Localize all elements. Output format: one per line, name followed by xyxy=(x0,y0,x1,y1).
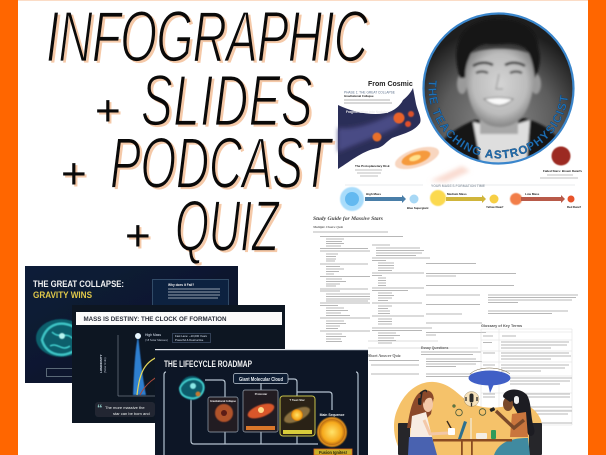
timeline: high mass xyxy=(340,187,429,211)
right chair xyxy=(529,423,542,455)
short answer key text xyxy=(369,360,419,374)
long answer questions heading: Essay Questions xyxy=(421,346,448,350)
quote: “ xyxy=(97,403,102,415)
timeline: low mass: Red Dwarf xyxy=(567,205,581,209)
infographic heading: From Cosmic xyxy=(368,81,413,88)
molecular cloud illustration xyxy=(180,376,204,400)
main sequence star: Main Sequence xyxy=(320,413,344,417)
table with tablet, cups and bowl xyxy=(433,418,512,455)
luminosity chart: (>8 Solar Masses) xyxy=(145,338,168,342)
panel: study guide document xyxy=(312,216,578,425)
luminosity chart: LUMINOSITY xyxy=(99,354,103,373)
glossary table xyxy=(481,324,572,425)
title line: + PODCAST: + xyxy=(63,152,89,200)
slide: the great collapse xyxy=(25,266,238,383)
title line: + QUIZ: QUIZ xyxy=(178,188,283,269)
fusion ignition label xyxy=(314,449,352,455)
title line: + PODCAST: PODCAST xyxy=(110,122,334,203)
left chair xyxy=(398,423,410,455)
infographic phase text xyxy=(342,88,395,114)
title line: + SLIDES: + xyxy=(97,88,123,138)
quote: The more massive the xyxy=(105,405,145,410)
fusion ignition label: Fusion Ignites! xyxy=(319,450,347,455)
title line: + SLIDES: + xyxy=(95,86,121,136)
slide heading: MASS IS DESTINY: THE CLOCK OF FORMATION xyxy=(84,317,226,323)
failed stars: brown dwarfs xyxy=(540,146,582,178)
card: gravitational collapse: Gravitational Collapse xyxy=(210,399,237,403)
timeline: high mass: Blue Supergiant xyxy=(407,206,429,210)
title line: INFOGRAPHIC: INFOGRAPHIC xyxy=(48,0,371,79)
roadmap connector lines xyxy=(164,372,358,455)
slide heading: THE GREAT COLLAPSE: xyxy=(33,279,124,289)
portrait ring xyxy=(424,14,574,164)
protoplanetary disk xyxy=(392,142,470,182)
woman with dark hair, right xyxy=(489,389,534,455)
giant molecular cloud label: Giant Molecular Cloud xyxy=(239,377,283,383)
quiz column 2 xyxy=(372,245,432,343)
title line: + SLIDES: SLIDES xyxy=(141,61,313,141)
card: t tauri star: T Tauri Star xyxy=(289,398,306,402)
section rule xyxy=(368,341,478,348)
circular caption: THE TEACHING ASTROPHYSICIST xyxy=(428,80,568,159)
timeline: medium mass: Medium Mass xyxy=(447,192,467,196)
quiz column 1 xyxy=(313,232,403,342)
slide heading: THE LIFECYCLE ROADMAP xyxy=(164,359,252,369)
infographic phase text: PHASE 1: THE GREAT COLLAPSE xyxy=(344,90,395,94)
panel: infographic preview xyxy=(338,81,582,211)
card: protostar xyxy=(243,390,278,432)
luminosity chart: High Mass xyxy=(145,333,161,337)
card: gravitational collapse xyxy=(208,397,238,432)
quote xyxy=(95,402,155,417)
callout box xyxy=(152,280,228,310)
timeline heading: YOUR MASS'S FORMATION TIME xyxy=(431,184,486,188)
teal nebula xyxy=(36,319,86,357)
speech bubble xyxy=(468,368,510,393)
card: t tauri star xyxy=(280,396,315,436)
study guide title: Study Guide for Massive Stars xyxy=(313,216,383,222)
callout box: Why does it Fail? xyxy=(168,283,194,287)
glossary table: Glossary of Key Terms xyxy=(481,324,522,328)
slide: mass is destiny xyxy=(72,305,285,423)
long answer questions text xyxy=(421,352,486,376)
luminosity chart: Fast Lane: ~10,000 Years xyxy=(175,334,208,338)
banner xyxy=(76,312,282,325)
essay questions block xyxy=(488,295,578,314)
title line: + SLIDES: SLIDES xyxy=(144,63,315,143)
luminosity chart xyxy=(99,333,210,396)
top edge strip xyxy=(18,0,588,1)
left orange border xyxy=(0,0,18,455)
timeline: medium mass xyxy=(430,190,503,209)
small floating icons xyxy=(453,405,486,416)
yellow backdrop blob xyxy=(394,382,542,455)
luminosity chart: (Solar Units) xyxy=(103,357,107,373)
main sequence star xyxy=(317,413,347,447)
slide: the lifecycle roadmap xyxy=(155,349,368,455)
quiz column 3: short answer xyxy=(426,264,516,335)
title line: + PODCAST: + xyxy=(61,150,87,198)
title line: + QUIZ: QUIZ xyxy=(175,186,281,267)
timeline: low mass: Low Mass xyxy=(525,192,540,196)
disk caption xyxy=(355,164,390,176)
slide sub-heading: GRAVITY WINS xyxy=(33,290,92,300)
caption box xyxy=(46,368,74,376)
right orange border xyxy=(588,0,606,455)
woman with headphones, left xyxy=(407,390,452,455)
failed stars: brown dwarfs: Failed Stars: Brown Dwarfs xyxy=(543,169,582,173)
card: protostar: Protostar xyxy=(255,392,268,396)
infographic phase text: Gravitational Collapse xyxy=(344,94,374,98)
title line: + QUIZ: + xyxy=(125,212,151,260)
luminosity chart: Powerful & Destructive xyxy=(175,338,204,342)
nebula illustration xyxy=(338,88,421,169)
microphone icon xyxy=(464,392,479,406)
logo: teaching astrophysicist portrait xyxy=(422,12,575,165)
giant molecular cloud label xyxy=(234,374,288,384)
timeline: high mass: High Mass xyxy=(366,192,381,196)
timeline: medium mass: Yellow Dwarf xyxy=(486,205,503,209)
timeline: low mass xyxy=(510,192,581,209)
disk caption: The Protoplanetary Disk xyxy=(355,164,390,168)
portrait photo xyxy=(422,12,574,170)
panel: podcast illustration xyxy=(394,368,542,455)
title line: + QUIZ: + xyxy=(127,214,153,262)
title line: + QUIZ xyxy=(125,186,283,269)
short answer key heading: Short Answer Quiz xyxy=(368,353,401,358)
quote: star can be born and xyxy=(113,411,150,416)
title line: + PODCAST: PODCAST xyxy=(112,124,336,205)
infographic phase text: Fragmentation into Nodules xyxy=(346,110,389,114)
section heading: multiple choice: Multiple Choice Quiz xyxy=(312,225,344,229)
title: infographic + slides + podcast + quiz xyxy=(46,0,371,269)
